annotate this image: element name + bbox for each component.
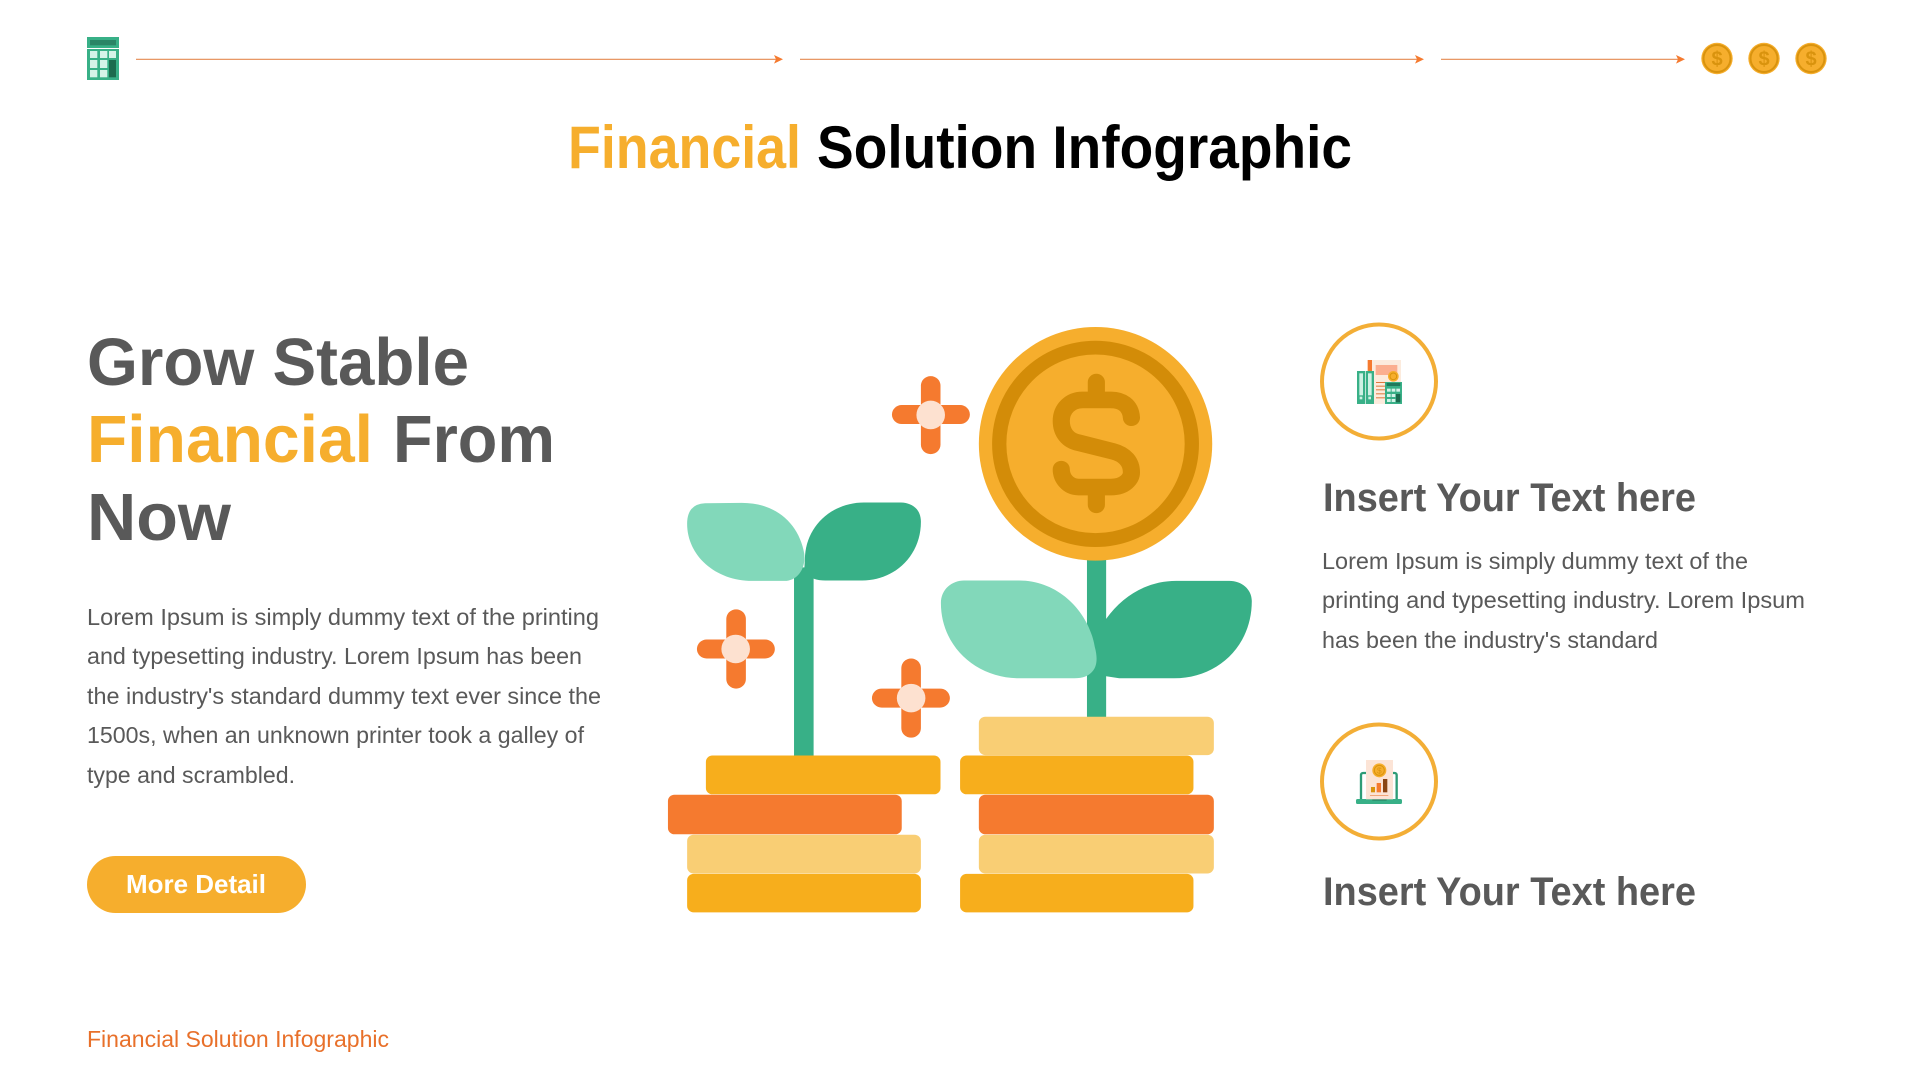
footer label: Financial Solution Infographic (87, 1026, 389, 1052)
heading: grow stable: From (393, 402, 555, 477)
leaf: right plant dark (1095, 581, 1252, 678)
stem: right plant (1087, 556, 1106, 718)
coin stack: left (668, 756, 940, 912)
heading: insert your text 1: Insert Your Text here (1323, 476, 1696, 520)
title: Solution Infographic (817, 114, 1352, 181)
leaf: right plant light (941, 580, 1097, 678)
stem: left plant (794, 567, 814, 757)
icon: calculator (87, 37, 119, 80)
heading: insert your text 2: Insert Your Text here (1323, 870, 1696, 914)
text block: description: 1500s, when an unknown printer took a galley of (87, 722, 585, 748)
text block: description: type and scrambled. (87, 762, 295, 788)
coin stack: right (960, 717, 1214, 912)
text block: description: the industry's standard dummy text ever since the (87, 683, 601, 709)
text block: right description: Lorem Ipsum is simply dummy text of the (1322, 548, 1748, 574)
icon: coin 3: $ (1805, 48, 1817, 70)
illustration: plants growing from coins (668, 327, 1252, 912)
icon: coin 2 (1748, 43, 1780, 74)
button: more detail: More Detail (126, 869, 266, 899)
text block: right description: has been the industry's standard (1322, 627, 1658, 653)
heading: grow stable (87, 325, 555, 555)
text block: right description (1322, 548, 1805, 653)
icon badge: laptop report (1322, 724, 1436, 838)
sparkle: middle (872, 658, 950, 738)
icon: coin 3 (1795, 43, 1827, 74)
text block: description: Lorem Ipsum is simply dummy text of the printing (87, 604, 599, 630)
icon: coin 1 (1701, 43, 1733, 74)
heading: grow stable: Now (87, 480, 232, 555)
arrow: second segment (800, 55, 1424, 64)
sparkle: top (892, 376, 970, 454)
icon: coin 1: $ (1711, 48, 1723, 70)
icon: coin 2: $ (1758, 48, 1770, 70)
text block: right description: printing and typesetting industry. Lorem Ipsum (1322, 587, 1805, 613)
title (568, 114, 1352, 181)
icon badge: laptop report: $ (1377, 765, 1382, 775)
coin with dollar sign (979, 327, 1212, 561)
button: more detail (87, 856, 306, 913)
leaf: left plant dark (804, 502, 921, 580)
text block: description: and typesetting industry. Lorem Ipsum has been (87, 643, 582, 669)
sparkle: left (697, 609, 775, 689)
arrow: first segment (136, 55, 783, 64)
leaf: left plant light (687, 503, 804, 581)
text block: description (87, 604, 601, 788)
heading: grow stable: Grow Stable (87, 325, 469, 400)
icon badge: city and documents (1322, 324, 1436, 438)
arrow: third segment (1441, 55, 1685, 64)
title: Financial (568, 114, 801, 181)
heading: grow stable: Financial (87, 402, 373, 477)
